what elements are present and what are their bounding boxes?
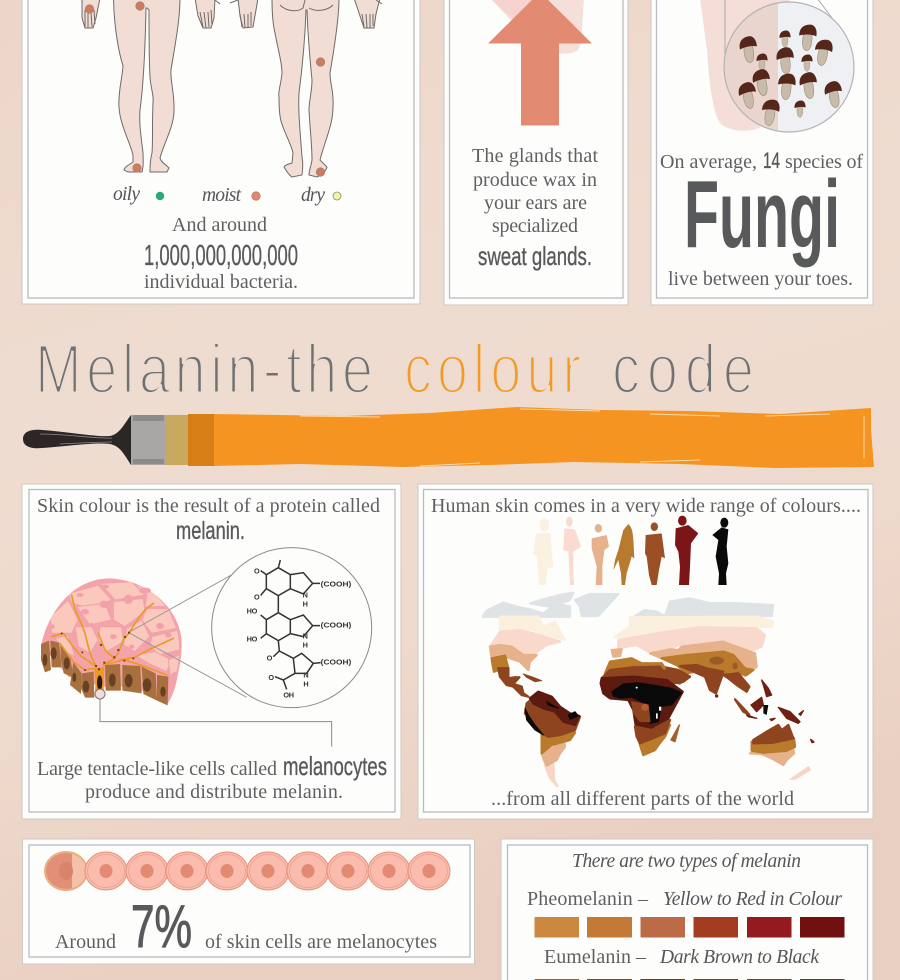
text: 7 percent: Around: [55, 931, 116, 953]
text: pheomelanin: [527, 888, 842, 910]
illustration: melanin molecule in lens: O: [254, 566, 260, 575]
illustration: skin cross-section: [41, 578, 182, 705]
illustration: melanin molecule in lens: N: [303, 670, 309, 679]
text: bacteria count: individual bacteria.: [144, 271, 298, 293]
text: pheomelanin: Yellow to Red in Colour: [663, 889, 842, 910]
illustration: melanin molecule in lens: HO: [247, 606, 258, 615]
world map: Americas: [483, 593, 618, 786]
illustration: melanin molecule in lens: O: [254, 593, 260, 602]
panel: 7% of skin cells: [22, 839, 474, 964]
illustration: melanin molecule in lens: O: [267, 654, 273, 663]
text: skin colour heading: [37, 495, 380, 545]
cell row: [45, 852, 450, 890]
illustration: melanin molecule in lens: H: [303, 640, 308, 649]
brush bristles: [166, 415, 188, 465]
illustration: melanin molecule in lens: HO: [247, 634, 258, 643]
text: sweat glands: your ears are: [484, 192, 587, 214]
africa: [638, 725, 670, 755]
text: melanocytes: melanocytes: [283, 751, 387, 781]
text: pheomelanin: Pheomelanin –: [527, 888, 649, 910]
text: skin colour heading: Skin colour is the result of a protein called: [37, 495, 380, 517]
text: fungi species: 14: [763, 148, 780, 173]
text: eumelanin: Eumelanin –: [544, 946, 647, 968]
panel: fungi between toes: [651, 0, 873, 305]
illustration: melanin molecule in lens: H: [303, 600, 308, 609]
text: melanocytes: [37, 751, 387, 803]
illustration: melanin molecule in lens: (COOH): [321, 657, 352, 666]
illustration: ear behind arrow: [490, 0, 584, 54]
illustration: magnifier with mushrooms: [720, 0, 858, 135]
text: range of colours: Human skin comes in a very wide range of colours....: [431, 495, 861, 517]
text: sweat glands: [472, 145, 598, 271]
panel: ear wax glands: [444, 0, 628, 305]
moist skin markers: [85, 2, 325, 176]
illustration: melanin molecule in lens: OH: [283, 690, 294, 699]
panel: two types of melanin: [501, 839, 873, 980]
text: fungi species: live between your toes.: [668, 268, 853, 290]
panel: range of skin colours: [418, 484, 873, 819]
text: fungi species: species of: [785, 151, 863, 173]
panel: melanin and melanocytes: [22, 484, 401, 819]
illustration: melanin molecule in lens: N: [303, 631, 308, 640]
legend: skin types: oily: [113, 184, 140, 205]
illustration: melanin molecule in lens: O: [268, 673, 274, 682]
text: bacteria count: [144, 214, 298, 293]
illustration: melanin molecule in lens: (COOH): [321, 621, 352, 630]
panel: bacteria on the body: [22, 0, 420, 304]
text: skin colour heading: melanin.: [176, 517, 245, 545]
title: Melanin - the colour code: colour: [404, 331, 581, 408]
paint stroke: [214, 407, 874, 468]
illustration: melanin molecule in lens: H: [303, 680, 309, 689]
swatches: pheomelanin: [534, 917, 844, 938]
text: 7 percent: of skin cells are melanocytes: [205, 931, 437, 953]
text: two types heading: There are two types of melanin: [572, 851, 801, 872]
callout: melanocyte leader line: [95, 689, 332, 747]
text: sweat glands: sweat glands.: [478, 241, 592, 271]
text: bacteria count: 1,000,000,000,000: [144, 240, 298, 272]
brush ferrule: [131, 415, 166, 465]
swatches: eumelanin: [534, 979, 844, 980]
brush handle: [23, 415, 131, 465]
legend: skin types: [113, 184, 341, 206]
figure: back view of legs and hands: [230, 0, 382, 177]
title: Melanin - the colour code: Melanin-the: [35, 331, 373, 408]
text: melanocytes: Large tentacle-like cells called: [37, 758, 277, 780]
illustration: melanin molecule in lens: (COOH): [321, 580, 352, 589]
text: melanocytes: produce and distribute melanin.: [85, 781, 343, 803]
title: Melanin - the colour code: [35, 331, 754, 408]
text: from all parts of the world: ...from all different parts of the world: [491, 788, 794, 810]
illustration: melanin molecule in lens: N: [303, 590, 308, 599]
text: 7 percent: 7%: [131, 893, 192, 960]
title: Melanin - the colour code: code: [612, 331, 754, 408]
text: sweat glands: produce wax in: [473, 169, 597, 191]
text: sweat glands: specialized: [492, 215, 578, 237]
text: 7 percent: [55, 893, 437, 960]
legend: skin types: moist: [202, 185, 242, 206]
legend: skin types: dry: [301, 185, 325, 206]
text: eumelanin: Dark Brown to Black: [659, 947, 819, 968]
text: sweat glands: The glands that: [472, 145, 598, 167]
world map: Africa, Eurasia, Australia: [601, 598, 814, 779]
australia: [750, 748, 794, 765]
people silhouettes: [533, 516, 728, 585]
paint stroke and brush: [23, 407, 874, 468]
text: fungi species: [660, 148, 863, 290]
text: fungi species: On average,: [660, 151, 757, 173]
text: bacteria count: And around: [172, 214, 267, 236]
illustration: foot: [700, 0, 790, 131]
icon: up arrow: [488, 0, 592, 126]
text: eumelanin: [544, 946, 819, 968]
figure: front view of legs and hands: [82, 0, 220, 172]
illustration: melanin molecule in lens: [130, 548, 372, 708]
